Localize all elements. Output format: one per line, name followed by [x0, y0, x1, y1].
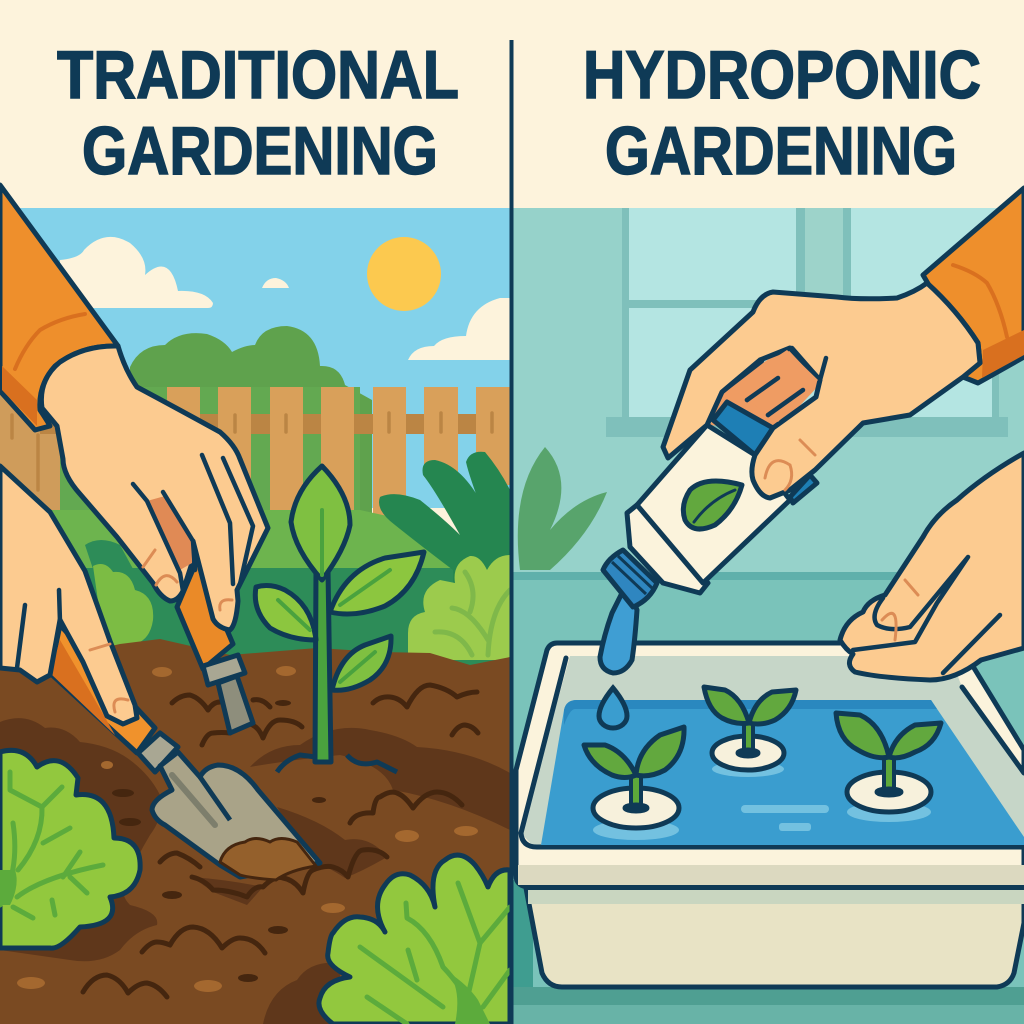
- bush veins: [435, 572, 510, 655]
- title: traditional gardening: GARDENING: [82, 113, 438, 189]
- icon: lower right hand: [840, 453, 1024, 680]
- sleeve shading: [982, 330, 1024, 378]
- trowel shading: [172, 775, 215, 825]
- water highlights: [593, 761, 931, 840]
- nails: [143, 550, 232, 610]
- lower hand lines: [17, 590, 60, 668]
- palm hollow lines: [747, 348, 826, 415]
- palm finger creases: [722, 361, 803, 415]
- icon: sun: [367, 237, 441, 311]
- centre divider: [510, 40, 514, 1024]
- lower hand details: [882, 580, 918, 640]
- right lettuce veins: [360, 883, 510, 1024]
- palm hollow fill: [730, 350, 818, 422]
- icon: fern: [379, 452, 510, 568]
- icon: light bush: [408, 555, 510, 660]
- icon: pouring liquid: [600, 583, 637, 673]
- sleeve fold shade: [2, 366, 37, 426]
- sky: [0, 208, 510, 508]
- title: hydroponic gardening: GARDENING: [605, 113, 957, 189]
- water: [541, 700, 1024, 845]
- tray body: [526, 888, 1024, 987]
- title: traditional gardening: [57, 37, 459, 189]
- background bushes: [130, 326, 372, 520]
- icon: seedling 2: [704, 687, 796, 770]
- icon: upper right hand: [663, 283, 980, 498]
- soil: [0, 639, 510, 1024]
- icon: small digging tool: [177, 560, 253, 733]
- left lettuce stem: [0, 870, 17, 905]
- title: traditional gardening: TRADITIONAL: [57, 37, 459, 113]
- finger gap and creases: [147, 496, 193, 570]
- right arm and hands: [663, 188, 1024, 680]
- icon: background plant: [518, 447, 607, 570]
- icon: hand trowel: [50, 625, 320, 880]
- title: hydroponic gardening: [583, 37, 981, 189]
- icon: seedling 3: [836, 713, 941, 812]
- plant leaf veins: [278, 510, 390, 682]
- icon: seedling 1: [584, 727, 684, 828]
- icon: lettuce right: [319, 855, 510, 1024]
- thumb nail: [765, 440, 815, 490]
- rim inner edges: [521, 658, 1024, 847]
- lower hand nail: [90, 644, 128, 712]
- left sleeve: [0, 185, 118, 430]
- icon: water drop: [599, 688, 627, 728]
- icon: lower left hand: [0, 466, 137, 724]
- darker soil patches: [0, 718, 510, 1024]
- wall: [513, 208, 1024, 608]
- icon: tray: [516, 643, 1024, 987]
- soil clumps: [83, 685, 478, 997]
- lettuce veins: [0, 772, 103, 918]
- left arm and hands: [0, 185, 268, 724]
- right lettuce stem: [454, 976, 490, 1024]
- icon: upper left hand: [41, 346, 268, 630]
- table edge and surface: [514, 572, 897, 580]
- icon: young plant: [255, 466, 424, 772]
- leaf label: [683, 481, 742, 529]
- mid green ground: [52, 510, 460, 568]
- icon: lettuce left: [0, 750, 140, 948]
- icon: small bush: [93, 564, 153, 650]
- palm hollow behind bottle: [710, 345, 824, 432]
- panel: hydroponic scene: [513, 208, 1024, 1024]
- tray inner wall: [521, 656, 1024, 847]
- bottle spout ridges: [612, 556, 652, 594]
- tray rim: [516, 643, 1024, 887]
- right sleeve: [923, 188, 1024, 383]
- icon: nutrient bottle: [603, 402, 817, 607]
- lower hand finger lines: [853, 557, 1000, 673]
- label leaf vein: [694, 490, 735, 522]
- panel: traditional garden scene: [0, 208, 510, 1024]
- window: [622, 208, 999, 417]
- clouds: [60, 237, 510, 360]
- wooden fence: [12, 387, 510, 525]
- window sill: [606, 417, 1008, 437]
